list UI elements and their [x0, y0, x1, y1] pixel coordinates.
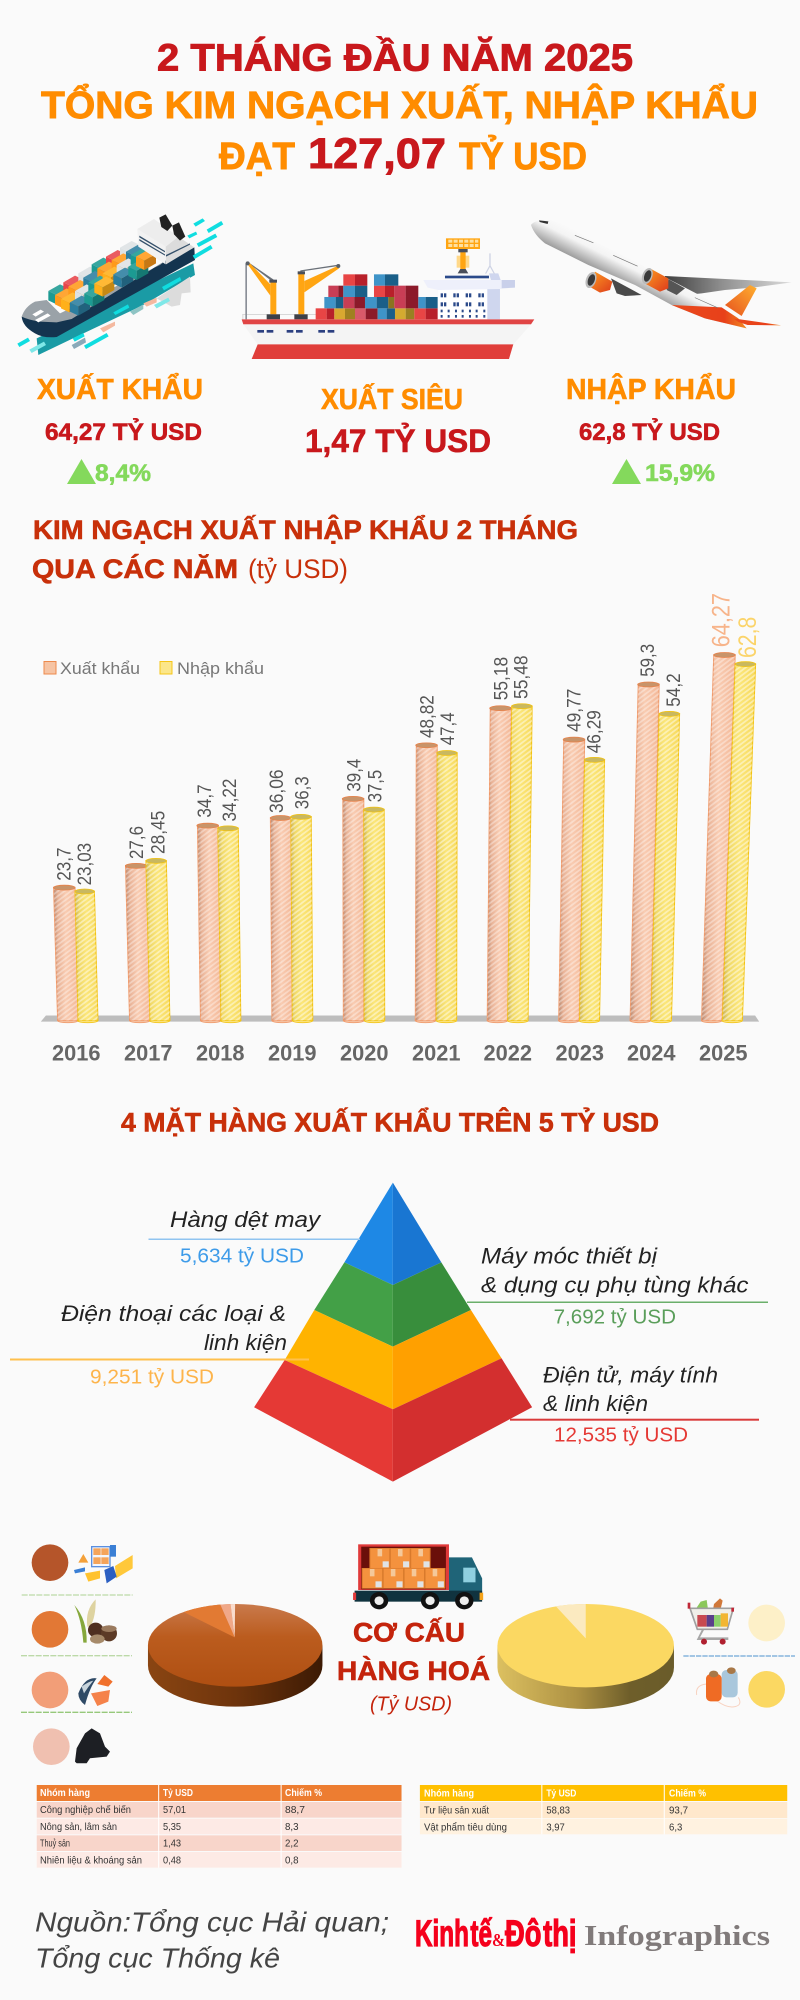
- superstructure: [423, 238, 515, 319]
- table: import groups: 3,97: [546, 1822, 565, 1834]
- callout: electronics: & linh kiện: [543, 1391, 648, 1416]
- logo: Kinh tế: [415, 1913, 492, 1954]
- containers: [48, 241, 156, 316]
- bars 2024: [630, 682, 680, 1023]
- swatch: consumer goods: [748, 1605, 785, 1641]
- table: import groups: Tư liệu sản xuất: [424, 1805, 489, 1817]
- table: export groups: Nông sản, lâm sản: [40, 1821, 117, 1833]
- callout: electronics: Điện tử, máy tính: [543, 1362, 718, 1387]
- callout: machinery: [467, 1243, 768, 1328]
- logo: [415, 1913, 770, 1954]
- pie chart: imports by group: [497, 1597, 674, 1709]
- table: export groups: Thuỷ sản: [40, 1838, 70, 1850]
- icon: shopping cart: [688, 1598, 734, 1645]
- table: import groups: 93,7: [669, 1805, 688, 1817]
- heading: top export items: 4 MẶT HÀNG XUẤT KHẨU TRÊN 5 TỶ USD: [121, 1106, 659, 1138]
- stat: trade surplus: 1,47 TỶ USD: [305, 423, 491, 459]
- bars 2025: [702, 653, 756, 1023]
- stat: exports: 8,4%: [95, 460, 151, 487]
- swatch: agriculture and forestry: [32, 1611, 68, 1648]
- title: TỔNG KIM NGẠCH XUẤT, NHẬP KHẨU: [41, 82, 758, 127]
- stat: imports: 62,8 TỶ USD: [579, 417, 720, 446]
- stat: trade surplus: XUẤT SIÊU: [321, 382, 463, 416]
- year axis labels: 2016: [52, 1041, 100, 1066]
- table: export groups: 1,43: [163, 1838, 181, 1850]
- table: import groups: Chiếm %: [669, 1788, 707, 1800]
- table: export groups: 88,7: [285, 1804, 305, 1816]
- callout: textiles: 5,634 tỷ USD: [180, 1246, 304, 1268]
- source note: [35, 1907, 389, 1973]
- callout: machinery: 7,692 tỷ USD: [554, 1306, 676, 1328]
- stat: exports: [37, 372, 203, 487]
- legend: Nhập khẩu: [177, 659, 264, 678]
- containers: [316, 274, 438, 319]
- title: ĐẠT: [219, 136, 295, 178]
- bars 2021: [415, 743, 457, 1023]
- year axis labels: [52, 1041, 748, 1066]
- bar value labels: 34,22: [220, 779, 241, 822]
- bar value labels: 34,7: [195, 784, 216, 818]
- bar value labels: 62,8: [734, 617, 762, 658]
- bar value labels: 46,29: [584, 710, 606, 753]
- bars 2022: [487, 704, 532, 1023]
- bar value labels: 39,4: [345, 758, 366, 792]
- table: export groups: 0,8: [285, 1855, 299, 1867]
- crane right: [294, 264, 340, 319]
- heading: trade value over years: [32, 514, 578, 584]
- year axis labels: 2017: [124, 1041, 172, 1066]
- bar value labels: 64,27: [708, 593, 736, 647]
- icon: fish and shrimp: [78, 1675, 113, 1706]
- bridge and funnels: [137, 214, 194, 264]
- bar value labels: 27,6: [127, 826, 148, 859]
- stat: exports: XUẤT KHẨU: [37, 372, 203, 406]
- crane left: [245, 261, 280, 319]
- heading: goods structure: CƠ CẤU: [353, 1616, 465, 1647]
- icon: cargo ship side view: [242, 238, 534, 359]
- import structure legend: [683, 1598, 795, 1708]
- stat: trade surplus: [305, 382, 491, 459]
- tier: electronics: [254, 1358, 532, 1482]
- table: import groups: Vật phẩm tiêu dùng: [424, 1822, 507, 1834]
- title: TỶ USD: [459, 134, 587, 178]
- callout: electronics: [510, 1362, 759, 1447]
- bar value labels: 37,5: [366, 770, 387, 802]
- bars 2019: [270, 814, 313, 1023]
- year axis labels: 2020: [340, 1041, 388, 1066]
- bar value labels: 54,2: [664, 673, 685, 707]
- dividers: [21, 1595, 133, 1712]
- callout: machinery: & dụng cụ phụ tùng khác: [481, 1272, 748, 1297]
- table: export groups: Chiếm %: [285, 1787, 323, 1799]
- table: export groups: Nhóm hàng: [40, 1787, 90, 1799]
- year axis labels: 2022: [484, 1041, 532, 1066]
- engine far: [583, 270, 612, 293]
- icon: delivery truck: [353, 1544, 483, 1609]
- stat: imports: NHẬP KHẨU: [566, 372, 736, 406]
- bar value labels: 23,7: [54, 847, 75, 881]
- bars 2018: [197, 823, 241, 1023]
- table: import groups: [420, 1785, 787, 1834]
- year axis labels: 2018: [196, 1041, 244, 1066]
- year axis labels: 2025: [699, 1041, 748, 1066]
- table: export groups: 2,2: [285, 1838, 299, 1850]
- table: import groups: Tỷ USD: [546, 1788, 577, 1800]
- year axis labels: 2021: [412, 1041, 460, 1066]
- callout: electronics: 12,535 tỷ USD: [554, 1425, 688, 1447]
- icon: rice and logs: [74, 1599, 117, 1644]
- swatch: seafood: [32, 1672, 68, 1708]
- tier: phones: [285, 1310, 502, 1409]
- table: import groups: 6,3: [669, 1822, 682, 1834]
- callout: phones: linh kiện: [204, 1330, 287, 1355]
- bar value labels: 55,48: [512, 655, 533, 699]
- callout: machinery: Máy móc thiết bị: [481, 1243, 658, 1268]
- year axis labels: 2024: [627, 1041, 676, 1066]
- table: import groups: Nhóm hàng: [424, 1788, 474, 1800]
- bar value labels: 23,03: [75, 843, 96, 885]
- bar value labels: 48,82: [418, 695, 439, 738]
- heading: goods structure: HÀNG HOÁ: [337, 1655, 490, 1686]
- icon: container ship, isometric: [17, 214, 223, 355]
- hull: [242, 319, 534, 359]
- tier: textiles: [344, 1183, 441, 1285]
- table: export groups: Nhiên liệu & khoáng sản: [40, 1855, 142, 1867]
- source note: Nguồn:Tổng cục Hải quan;: [35, 1907, 389, 1938]
- swatch: fuel and minerals: [33, 1728, 70, 1765]
- bar value labels: 36,06: [267, 769, 288, 813]
- bars 2023: [559, 737, 605, 1023]
- export structure legend: [21, 1544, 133, 1765]
- table: export groups: 0,48: [163, 1855, 181, 1867]
- callout: phones: [10, 1301, 309, 1388]
- bar value labels: [54, 593, 762, 885]
- table: export groups: 5,35: [163, 1821, 181, 1833]
- legend: Xuất khẩu: [60, 659, 140, 678]
- bar value labels: 55,18: [492, 657, 513, 700]
- table: export groups: Tỷ USD: [163, 1787, 193, 1799]
- title: 127,07: [308, 130, 446, 178]
- bars 2017: [126, 858, 170, 1023]
- year axis labels: 2019: [268, 1041, 316, 1066]
- bar value labels: 28,45: [148, 811, 169, 854]
- bar chart: [41, 593, 762, 1066]
- bar value labels: 59,3: [638, 644, 659, 677]
- bar value labels: 36,3: [293, 776, 314, 809]
- heading: trade value over years: KIM NGẠCH XUẤT NHẬP KHẨU 2 THÁNG: [33, 514, 578, 545]
- heading: trade value over years: (tỷ USD): [248, 554, 348, 584]
- logo: Đô thị: [505, 1913, 576, 1954]
- heading: goods structure: (Tỷ USD): [370, 1694, 452, 1716]
- source note: Tổng cục Thống kê: [35, 1942, 280, 1973]
- title: 2 THÁNG ĐẦU NĂM 2025: [157, 36, 633, 80]
- engine near: [640, 266, 668, 292]
- logo: &: [492, 1930, 505, 1950]
- icon: thread spools: [696, 1667, 740, 1707]
- table: export groups: 57,01: [163, 1804, 186, 1816]
- icon: coal: [75, 1728, 110, 1763]
- table: export groups: Công nghiệp chế biến: [40, 1804, 131, 1816]
- callout: phones: Điện thoại các loại &: [61, 1301, 286, 1326]
- pie chart: exports by group: [148, 1597, 322, 1707]
- table: import groups: 58,83: [546, 1805, 570, 1817]
- callout: textiles: Hàng dệt may: [170, 1207, 322, 1232]
- logo: Infographics: [584, 1920, 770, 1952]
- callout: textiles: [148, 1207, 360, 1268]
- bar value labels: 47,4: [438, 712, 459, 745]
- year axis labels: 2023: [556, 1041, 604, 1066]
- swatch: processed industry: [32, 1544, 68, 1581]
- heading: goods structure: [337, 1616, 490, 1716]
- swatch: production goods: [748, 1671, 785, 1708]
- pyramid chart: [254, 1183, 532, 1482]
- icon: warehouse and truck: [74, 1545, 133, 1583]
- cargo boxes: [362, 1548, 445, 1588]
- callout: phones: 9,251 tỷ USD: [90, 1366, 214, 1388]
- table: export groups: [37, 1785, 402, 1868]
- table: export groups: 8,3: [285, 1821, 299, 1833]
- stat: exports: 64,27 TỶ USD: [45, 417, 202, 446]
- tier: machinery: [314, 1262, 471, 1347]
- railing: [242, 314, 365, 319]
- bars 2016: [54, 885, 98, 1023]
- stat: imports: 15,9%: [645, 460, 715, 487]
- legend: [44, 659, 264, 678]
- stat: imports: [566, 372, 736, 487]
- heading: trade value over years: QUA CÁC NĂM: [32, 553, 238, 584]
- title: [41, 36, 758, 178]
- bars 2020: [342, 796, 385, 1023]
- bar value labels: 49,77: [565, 689, 586, 732]
- chart bars: [41, 653, 759, 1023]
- icon: airplane: [531, 220, 792, 328]
